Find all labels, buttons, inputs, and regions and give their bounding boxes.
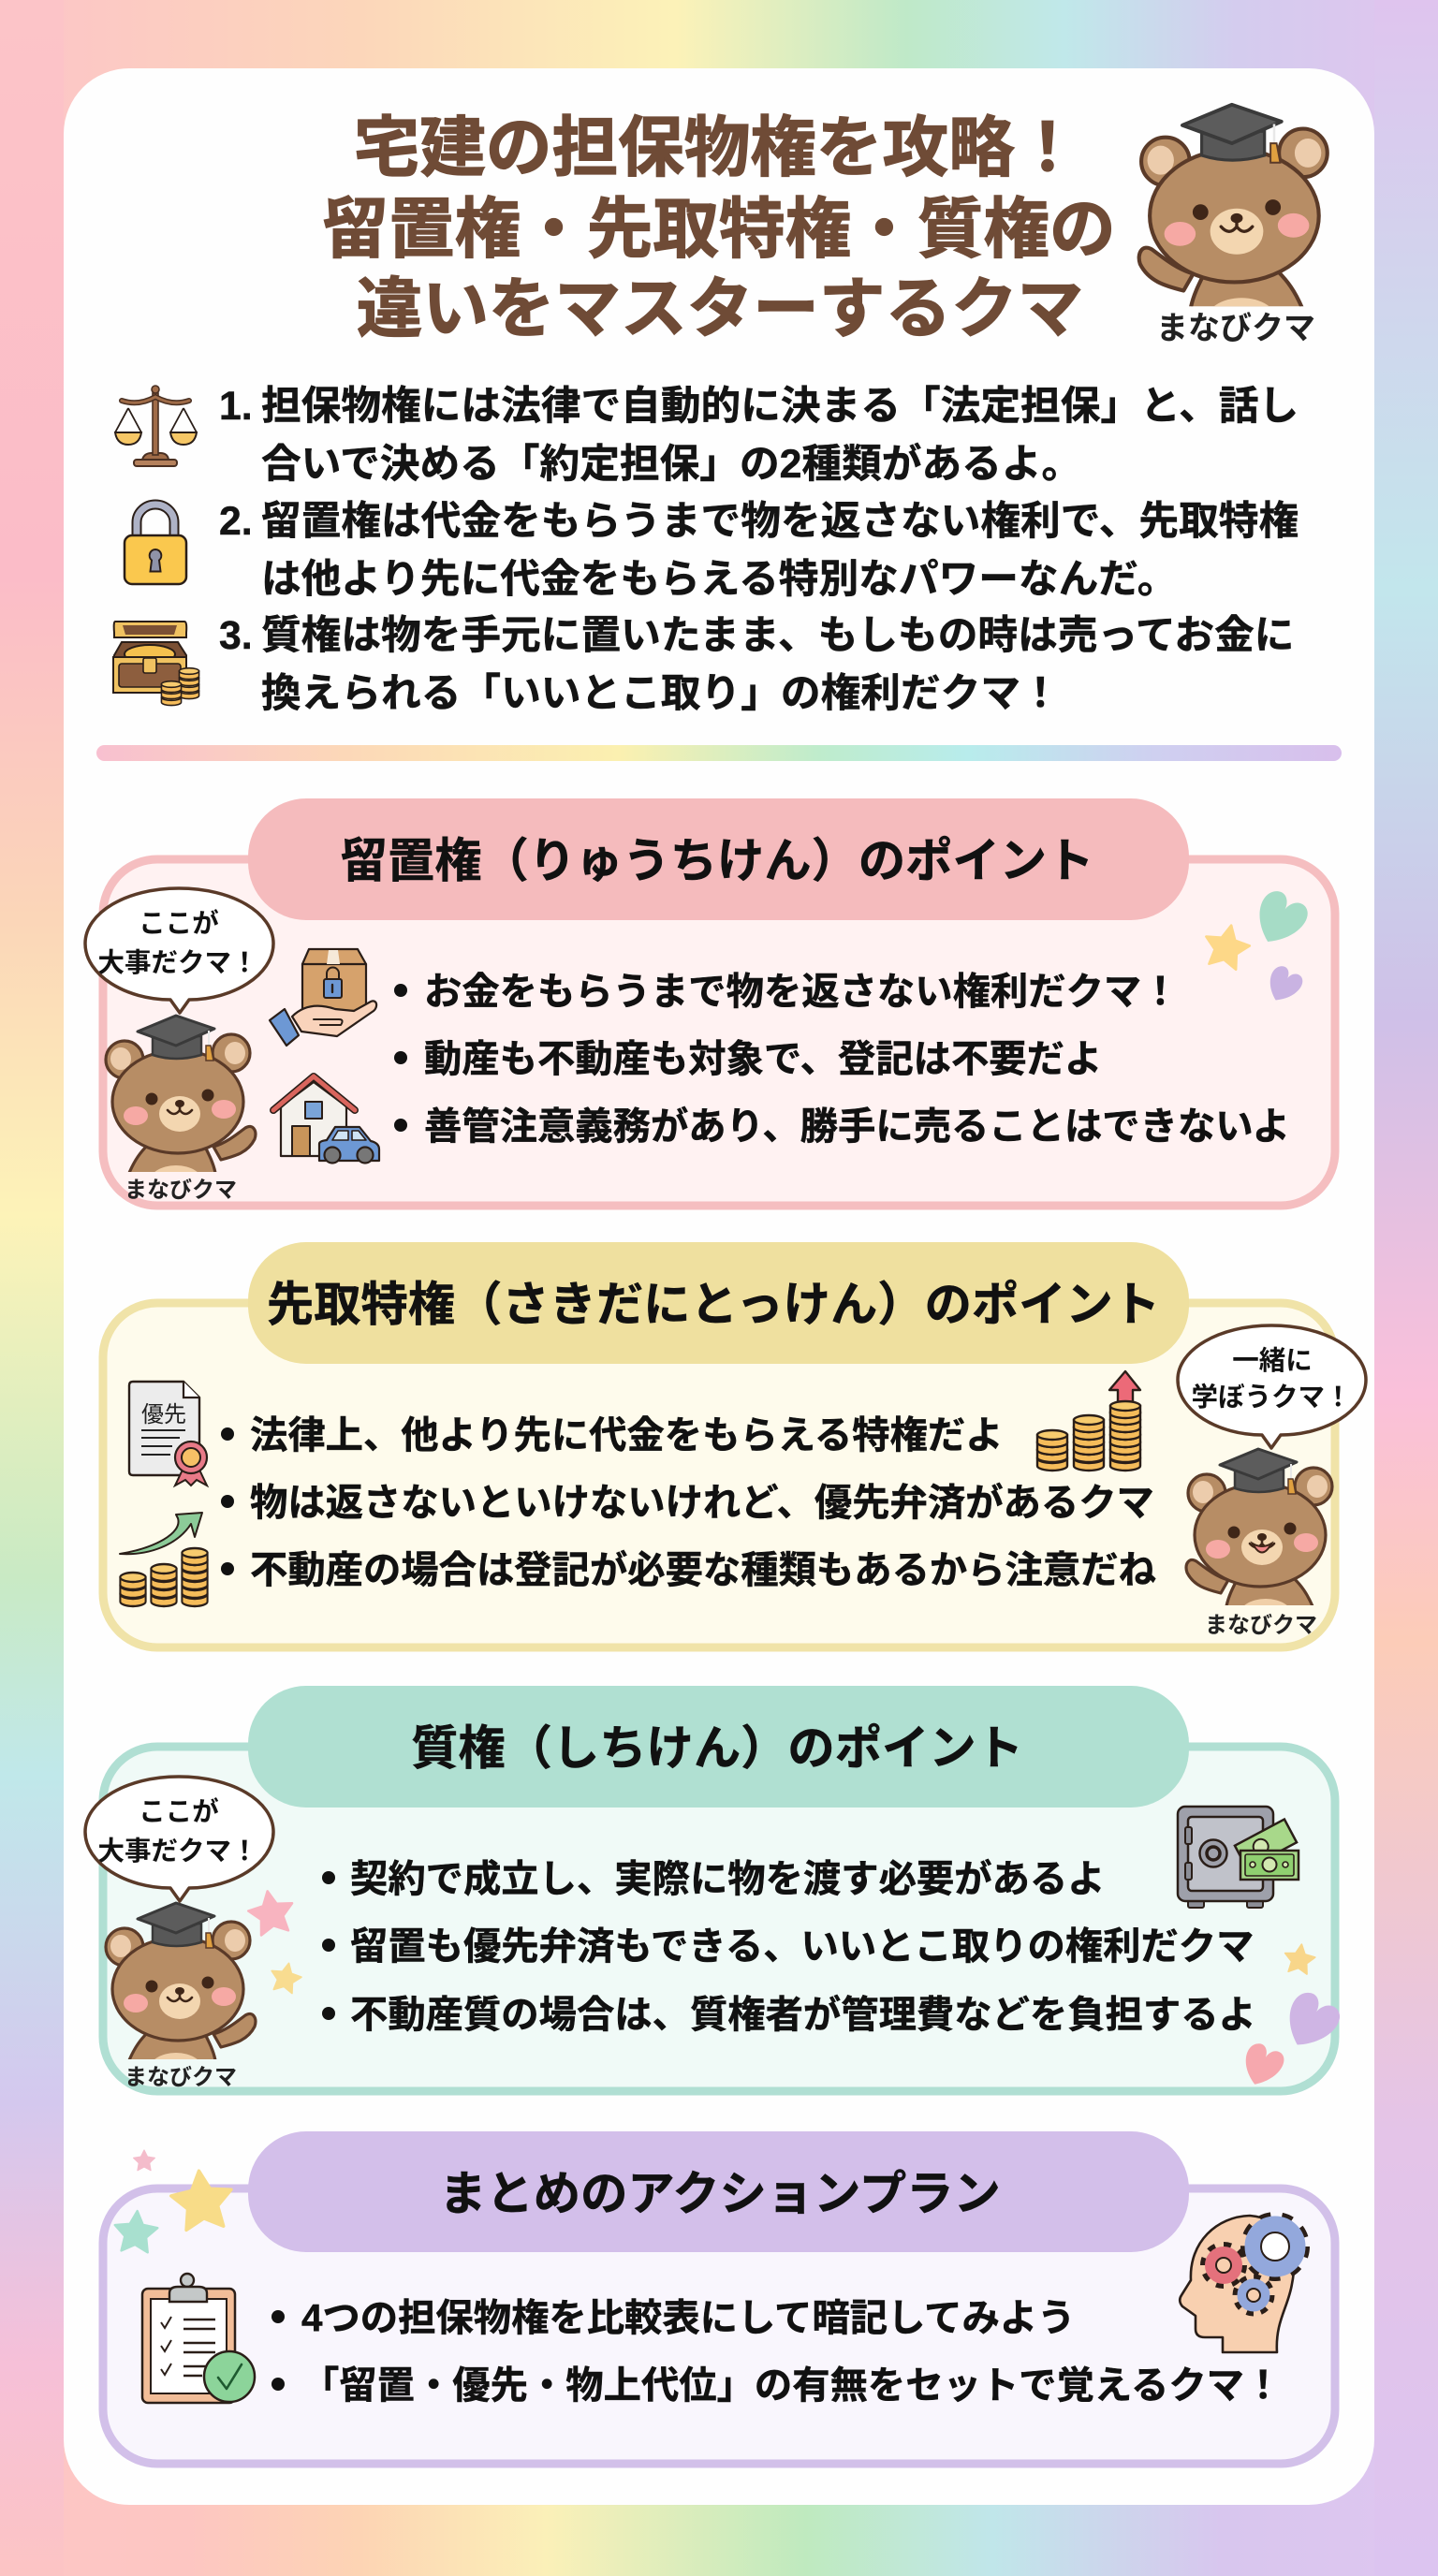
decoration: stars <box>113 2150 235 2253</box>
bullet list: 動産も不動産も対象で、登記は不要だよ <box>424 1037 1102 1080</box>
heading: まとめのアクションプラン <box>439 2167 1001 2220</box>
decoration: hearts and star <box>1201 886 1313 1007</box>
title <box>322 110 1116 345</box>
numbered summary list: 2. <box>219 499 253 544</box>
speech bubble: 大事だクマ！ <box>97 1837 258 1866</box>
numbered summary list: 3. <box>219 613 253 658</box>
heading pill <box>248 2131 1189 2252</box>
bullet list: 善管注意義務があり、勝手に売ることはできないよ <box>424 1105 1290 1148</box>
bullet list: 「留置・優先・物上代位」の有無をセットで覚えるクマ！ <box>301 2364 1282 2407</box>
numbered summary list: 1. <box>219 384 253 429</box>
bullet list: お金をもらうまで物を返さない権利だクマ！ <box>424 970 1180 1013</box>
speech bubble: 一緒に <box>1232 1346 1313 1376</box>
speech bubble: ここが <box>139 1796 219 1827</box>
mascot bear <box>1186 1449 1332 1638</box>
mascot bear <box>106 1016 256 1203</box>
panel: 留置権 <box>85 798 1335 1206</box>
icon: rising arrow with coins <box>120 1513 208 1606</box>
decoration: star and hearts <box>1238 1942 1344 2091</box>
icon: scales <box>115 386 197 466</box>
title: 違いをマスターするクマ <box>357 271 1083 345</box>
heading: 質権（しちけん）のポイント <box>411 1721 1023 1775</box>
speech bubble: 大事だクマ！ <box>97 948 258 978</box>
mascot bear: まなびクマ <box>1205 1613 1317 1638</box>
title: 留置権・先取特権・質権の <box>322 192 1116 266</box>
bullet list: 不動産の場合は登記が必要な種類もあるから注意だね <box>250 1548 1156 1591</box>
icon: padlock <box>125 505 186 584</box>
speech bubble <box>85 888 273 1013</box>
speech bubble: 学ぼうクマ！ <box>1191 1383 1352 1412</box>
bullet list: 4つの担保物権を比較表にして暗記してみよう <box>301 2296 1076 2339</box>
icon: priority document: 優先 <box>141 1402 186 1427</box>
icon: treasure chest <box>113 622 199 706</box>
mascot: header bear <box>1139 105 1328 346</box>
speech bubble <box>1178 1325 1366 1448</box>
bullet list <box>221 1413 1156 1591</box>
rainbow divider <box>96 745 1342 761</box>
icon: priority document <box>129 1382 207 1486</box>
panel: 先取特権 <box>103 1242 1366 1647</box>
speech bubble: ここが <box>139 908 219 939</box>
mascot bear: まなびクマ <box>125 2065 237 2090</box>
icon: box on hand <box>270 949 376 1046</box>
numbered summary list: 担保物権には法律で自動的に決まる「法定担保」と、話し <box>261 384 1299 429</box>
icon: head with gears <box>1180 2216 1302 2352</box>
bullet list: 法律上、他より先に代金をもらえる特権だよ <box>250 1413 1004 1456</box>
panel box <box>103 1747 1335 2091</box>
heading: 留置権（りゅうちけん）のポイント <box>341 834 1093 887</box>
mascot bear <box>106 1903 256 2090</box>
icon: checklist clipboard <box>142 2274 255 2403</box>
panel box <box>103 859 1335 1206</box>
panel: 質権 <box>85 1686 1344 2091</box>
bullet list: 留置も優先弁済もできる、いいとこ取りの権利だクマ <box>350 1925 1254 1968</box>
panel: まとめのアクションプラン <box>103 2131 1335 2464</box>
heading pill <box>248 798 1189 920</box>
numbered summary list: 換えられる「いいとこ取り」の権利だクマ！ <box>261 671 1061 716</box>
heading pill <box>248 1242 1189 1364</box>
numbered summary list: 合いで決める「約定担保」の2種類があるよ。 <box>261 442 1081 487</box>
panel box <box>103 1303 1335 1647</box>
speech bubble <box>85 1777 273 1901</box>
title: 宅建の担保物権を攻略！ <box>354 110 1080 184</box>
bullet list: 不動産質の場合は、質権者が管理費などを負担するよ <box>350 1993 1256 2036</box>
icon: coin stacks with up arrow <box>1037 1371 1140 1471</box>
numbered summary list: 質権は物を手元に置いたまま、もしもの時は売ってお金に <box>261 613 1294 658</box>
heading pill <box>248 1686 1189 1808</box>
heading: 先取特権（さきだにとっけん）のポイント <box>267 1278 1160 1331</box>
numbered summary list: 留置権は代金をもらうまで物を返さない権利で、先取特権 <box>261 499 1299 544</box>
decoration: stars <box>245 1887 303 1995</box>
bullet list <box>394 970 1290 1148</box>
panel box <box>103 2188 1335 2464</box>
bullet list: 物は返さないといけないけれど、優先弁済があるクマ <box>250 1481 1154 1524</box>
icon: safe with money <box>1178 1807 1299 1908</box>
numbered summary list <box>219 384 1299 716</box>
mascot bear: まなびクマ <box>125 1178 237 1203</box>
numbered summary list: は他より先に代金をもらえる特別なパワーなんだ。 <box>261 557 1177 602</box>
bullet list <box>322 1857 1256 2036</box>
bullet list <box>271 2296 1282 2407</box>
bullet list: 契約で成立し、実際に物を渡す必要があるよ <box>350 1857 1106 1900</box>
mascot: header bear: まなびクマ <box>1156 311 1315 346</box>
icon: house and car <box>273 1076 379 1163</box>
